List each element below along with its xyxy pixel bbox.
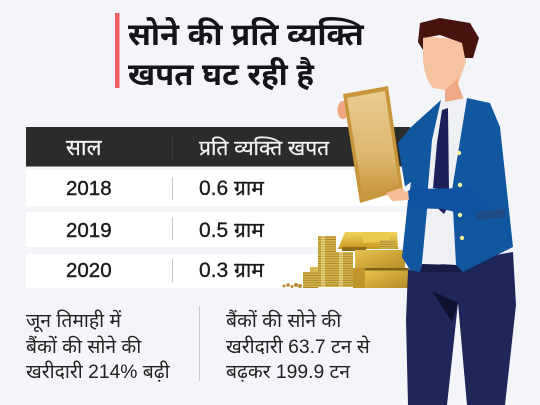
row 2020: 2020 [66, 259, 112, 282]
man holding gold bar [338, 18, 516, 405]
row 2020: 0.3 ग्राम [199, 259, 264, 282]
jacket pocket [476, 209, 505, 220]
row 2019: 0.5 ग्राम [199, 219, 264, 242]
note: left: खरीदारी 214% बढ़ी [26, 361, 171, 383]
title: खपत घट रही है [128, 57, 315, 92]
neck and face [423, 36, 466, 108]
table header: प्रति व्यक्ति खपत [199, 136, 330, 160]
row 2019 [26, 212, 410, 247]
gold bar held [343, 86, 403, 203]
row 2019: 2019 [66, 219, 112, 242]
lower hand [386, 188, 409, 201]
jacket [398, 100, 441, 272]
note: right: बैंकों की सोने की [226, 309, 342, 332]
shirt [422, 98, 465, 265]
trouser waist shadow [420, 264, 463, 272]
row 2018 [26, 170, 410, 206]
note: right: बढ़कर 199.9 टन [226, 362, 350, 383]
row 2018: 2018 [66, 177, 112, 200]
title: सोने की प्रति व्यक्ति [128, 17, 365, 52]
row 2018: 0.6 ग्राम [199, 177, 264, 200]
jacket buttons [457, 151, 464, 240]
note: right: खरीदारी 63.7 टन से [226, 335, 371, 358]
upper hand [338, 101, 348, 119]
note: right [226, 309, 371, 383]
row 2020 [26, 254, 410, 288]
hair [418, 18, 479, 58]
table [26, 127, 410, 288]
gold bars and coins [282, 232, 409, 288]
note: left [26, 309, 171, 383]
note: left: जून तिमाही में [26, 309, 121, 333]
table header [26, 127, 410, 166]
title [128, 17, 365, 92]
trousers [406, 252, 516, 405]
title accent bar [115, 13, 120, 88]
jacket sleeve [408, 188, 500, 218]
tie [433, 108, 449, 190]
note: left: बैंकों की सोने की [26, 335, 142, 358]
table header: साल [66, 135, 103, 160]
